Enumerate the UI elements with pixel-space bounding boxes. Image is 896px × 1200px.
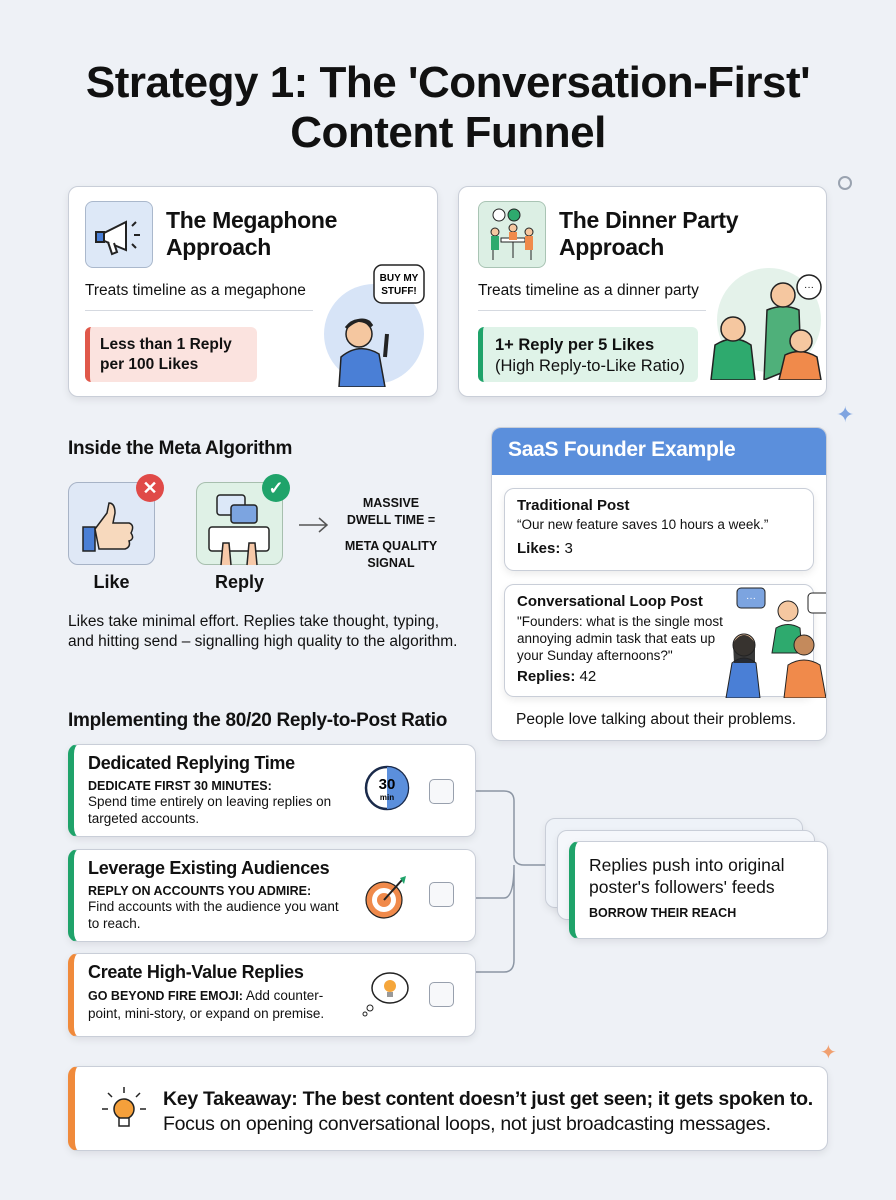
text: ✦ — [836, 402, 854, 427]
icon: reply — [196, 474, 290, 592]
stat pill: (High Reply-to-Like Ratio) — [495, 357, 685, 375]
callout: borrow their reach (stacked cards): poster's followers' feeds — [589, 877, 775, 897]
callout: borrow their reach (stacked cards): BORROW THEIR REACH — [589, 906, 736, 920]
item: dedicated replying time: targeted accounts. — [88, 811, 199, 826]
text: explanation — [68, 613, 457, 650]
callout: dwell time signal: MASSIVE — [363, 496, 419, 510]
heading — [559, 207, 738, 260]
icon: like — [68, 474, 164, 592]
item: dedicated replying time — [68, 744, 476, 837]
header: SaaS Founder Example — [508, 438, 735, 461]
panel: megaphone approach — [68, 186, 438, 397]
icon: timer: 30 — [379, 776, 395, 793]
item: create high-value replies: Create High-Value Replies — [88, 962, 304, 982]
icon: thought bulb — [362, 972, 409, 1016]
icon: target — [365, 876, 406, 919]
decorations — [838, 176, 852, 190]
illustration: shouting man: STUFF! — [381, 286, 417, 297]
illustration: dinner party people: ··· — [804, 282, 814, 293]
heading: Approach — [166, 234, 271, 260]
checkbox — [429, 982, 454, 1007]
badge: check: ✓ — [268, 478, 284, 498]
illustration: chatting people — [726, 588, 826, 698]
title: Content Funnel — [290, 108, 606, 157]
title — [86, 58, 810, 157]
panel: SaaS founder example — [491, 427, 827, 741]
illustration: dinner party people — [710, 268, 822, 380]
illustration: chatting people: ··· — [746, 593, 756, 604]
conversational loop card: Replies: 42 — [517, 668, 596, 685]
callout: borrow their reach (stacked cards) — [544, 818, 828, 942]
title: Strategy 1: The 'Conversation-First' — [86, 58, 810, 107]
icon: megaphone — [85, 201, 153, 268]
traditional post card: Likes: 3 — [517, 540, 573, 557]
item: create high-value replies: GO BEYOND FIRE EMOJI: Add counter- — [88, 988, 323, 1003]
item: leverage existing audiences: Leverage Existing Audiences — [88, 858, 329, 878]
callout: dwell time signal: META QUALITY — [345, 539, 437, 553]
text — [163, 1088, 813, 1135]
callout: borrow their reach (stacked cards): Replies push into original — [589, 855, 785, 875]
callout: dwell time signal: DWELL TIME = — [347, 513, 435, 527]
conversational loop card: "Founders: what is the single most — [517, 614, 723, 629]
icon: dinner table — [478, 201, 546, 268]
panel: key takeaway — [68, 1066, 828, 1151]
callout: dwell time signal: SIGNAL — [367, 556, 415, 570]
traditional post card: Traditional Post — [517, 497, 630, 514]
heading: implementing ratio: Implementing the 80/20 Reply-to-Post Ratio — [68, 710, 447, 731]
text: explanation: Likes take minimal effort. Replies take thought, typing, — [68, 613, 439, 630]
text: Treats timeline as a megaphone — [85, 282, 306, 299]
text: Treats timeline as a dinner party — [478, 282, 699, 299]
heading: Approach — [559, 234, 664, 260]
conversational loop card — [504, 584, 814, 697]
heading: The Megaphone — [166, 207, 337, 233]
icon: timer: min — [380, 793, 394, 802]
heading — [166, 207, 337, 260]
traditional post card — [504, 488, 814, 571]
item: create high-value replies: point, mini-story, or expand on premise. — [88, 1006, 324, 1021]
checkbox — [429, 779, 454, 804]
callout: dwell time signal — [345, 496, 437, 570]
conversational loop card: Conversational Loop Post — [517, 593, 703, 610]
text: ✦ — [820, 1042, 837, 1064]
icon: timer — [364, 766, 410, 810]
badge: x — [136, 474, 164, 502]
conversational loop card: your Sunday afternoons?" — [517, 648, 673, 663]
item: dedicated replying time: Spend time entirely on leaving replies on — [88, 794, 331, 809]
illustration: shouting man — [324, 264, 425, 387]
stat pill: Less than 1 Reply — [100, 336, 232, 353]
illustration: shouting man: BUY MY — [380, 273, 419, 284]
header — [492, 428, 828, 475]
item: create high-value replies — [68, 953, 476, 1037]
text: Key Takeaway: The best content doesn’t just get seen; it gets spoken to. — [163, 1088, 813, 1110]
item: leverage existing audiences: to reach. — [88, 916, 141, 931]
icon: reply: Reply — [215, 572, 264, 592]
item: dedicated replying time: DEDICATE FIRST 30 MINUTES: — [88, 779, 272, 793]
item: leverage existing audiences: REPLY ON ACCOUNTS YOU ADMIRE: — [88, 884, 311, 898]
checkbox — [429, 882, 454, 907]
heading: inside the meta algorithm: Inside the Meta Algorithm — [68, 438, 292, 459]
text: caption: People love talking about their problems. — [516, 711, 796, 728]
traditional post card: “Our new feature saves 10 hours a week.” — [517, 517, 768, 532]
stat pill — [478, 327, 698, 382]
panel: dinner party approach — [458, 186, 827, 397]
item: dedicated replying time: Dedicated Replying Time — [88, 753, 295, 773]
stat pill — [85, 327, 257, 382]
stat pill: per 100 Likes — [100, 356, 198, 373]
stat pill: 1+ Reply per 5 Likes — [495, 336, 654, 354]
item: leverage existing audiences — [68, 849, 476, 942]
text: Focus on opening conversational loops, not just broadcasting messages. — [163, 1113, 771, 1135]
item: leverage existing audiences: Find accounts with the audience you want — [88, 899, 339, 914]
conversational loop card: annoying admin task that eats up — [517, 631, 715, 646]
badge: x: ✕ — [142, 478, 158, 498]
connector lines — [476, 790, 545, 973]
icon: like: Like — [93, 572, 130, 592]
badge: check — [262, 474, 290, 502]
heading: The Dinner Party — [559, 207, 738, 233]
icon: lightbulb — [102, 1087, 146, 1127]
arrow — [299, 518, 328, 532]
text: explanation: and hitting send – signalling high quality to the algorithm. — [68, 633, 457, 650]
